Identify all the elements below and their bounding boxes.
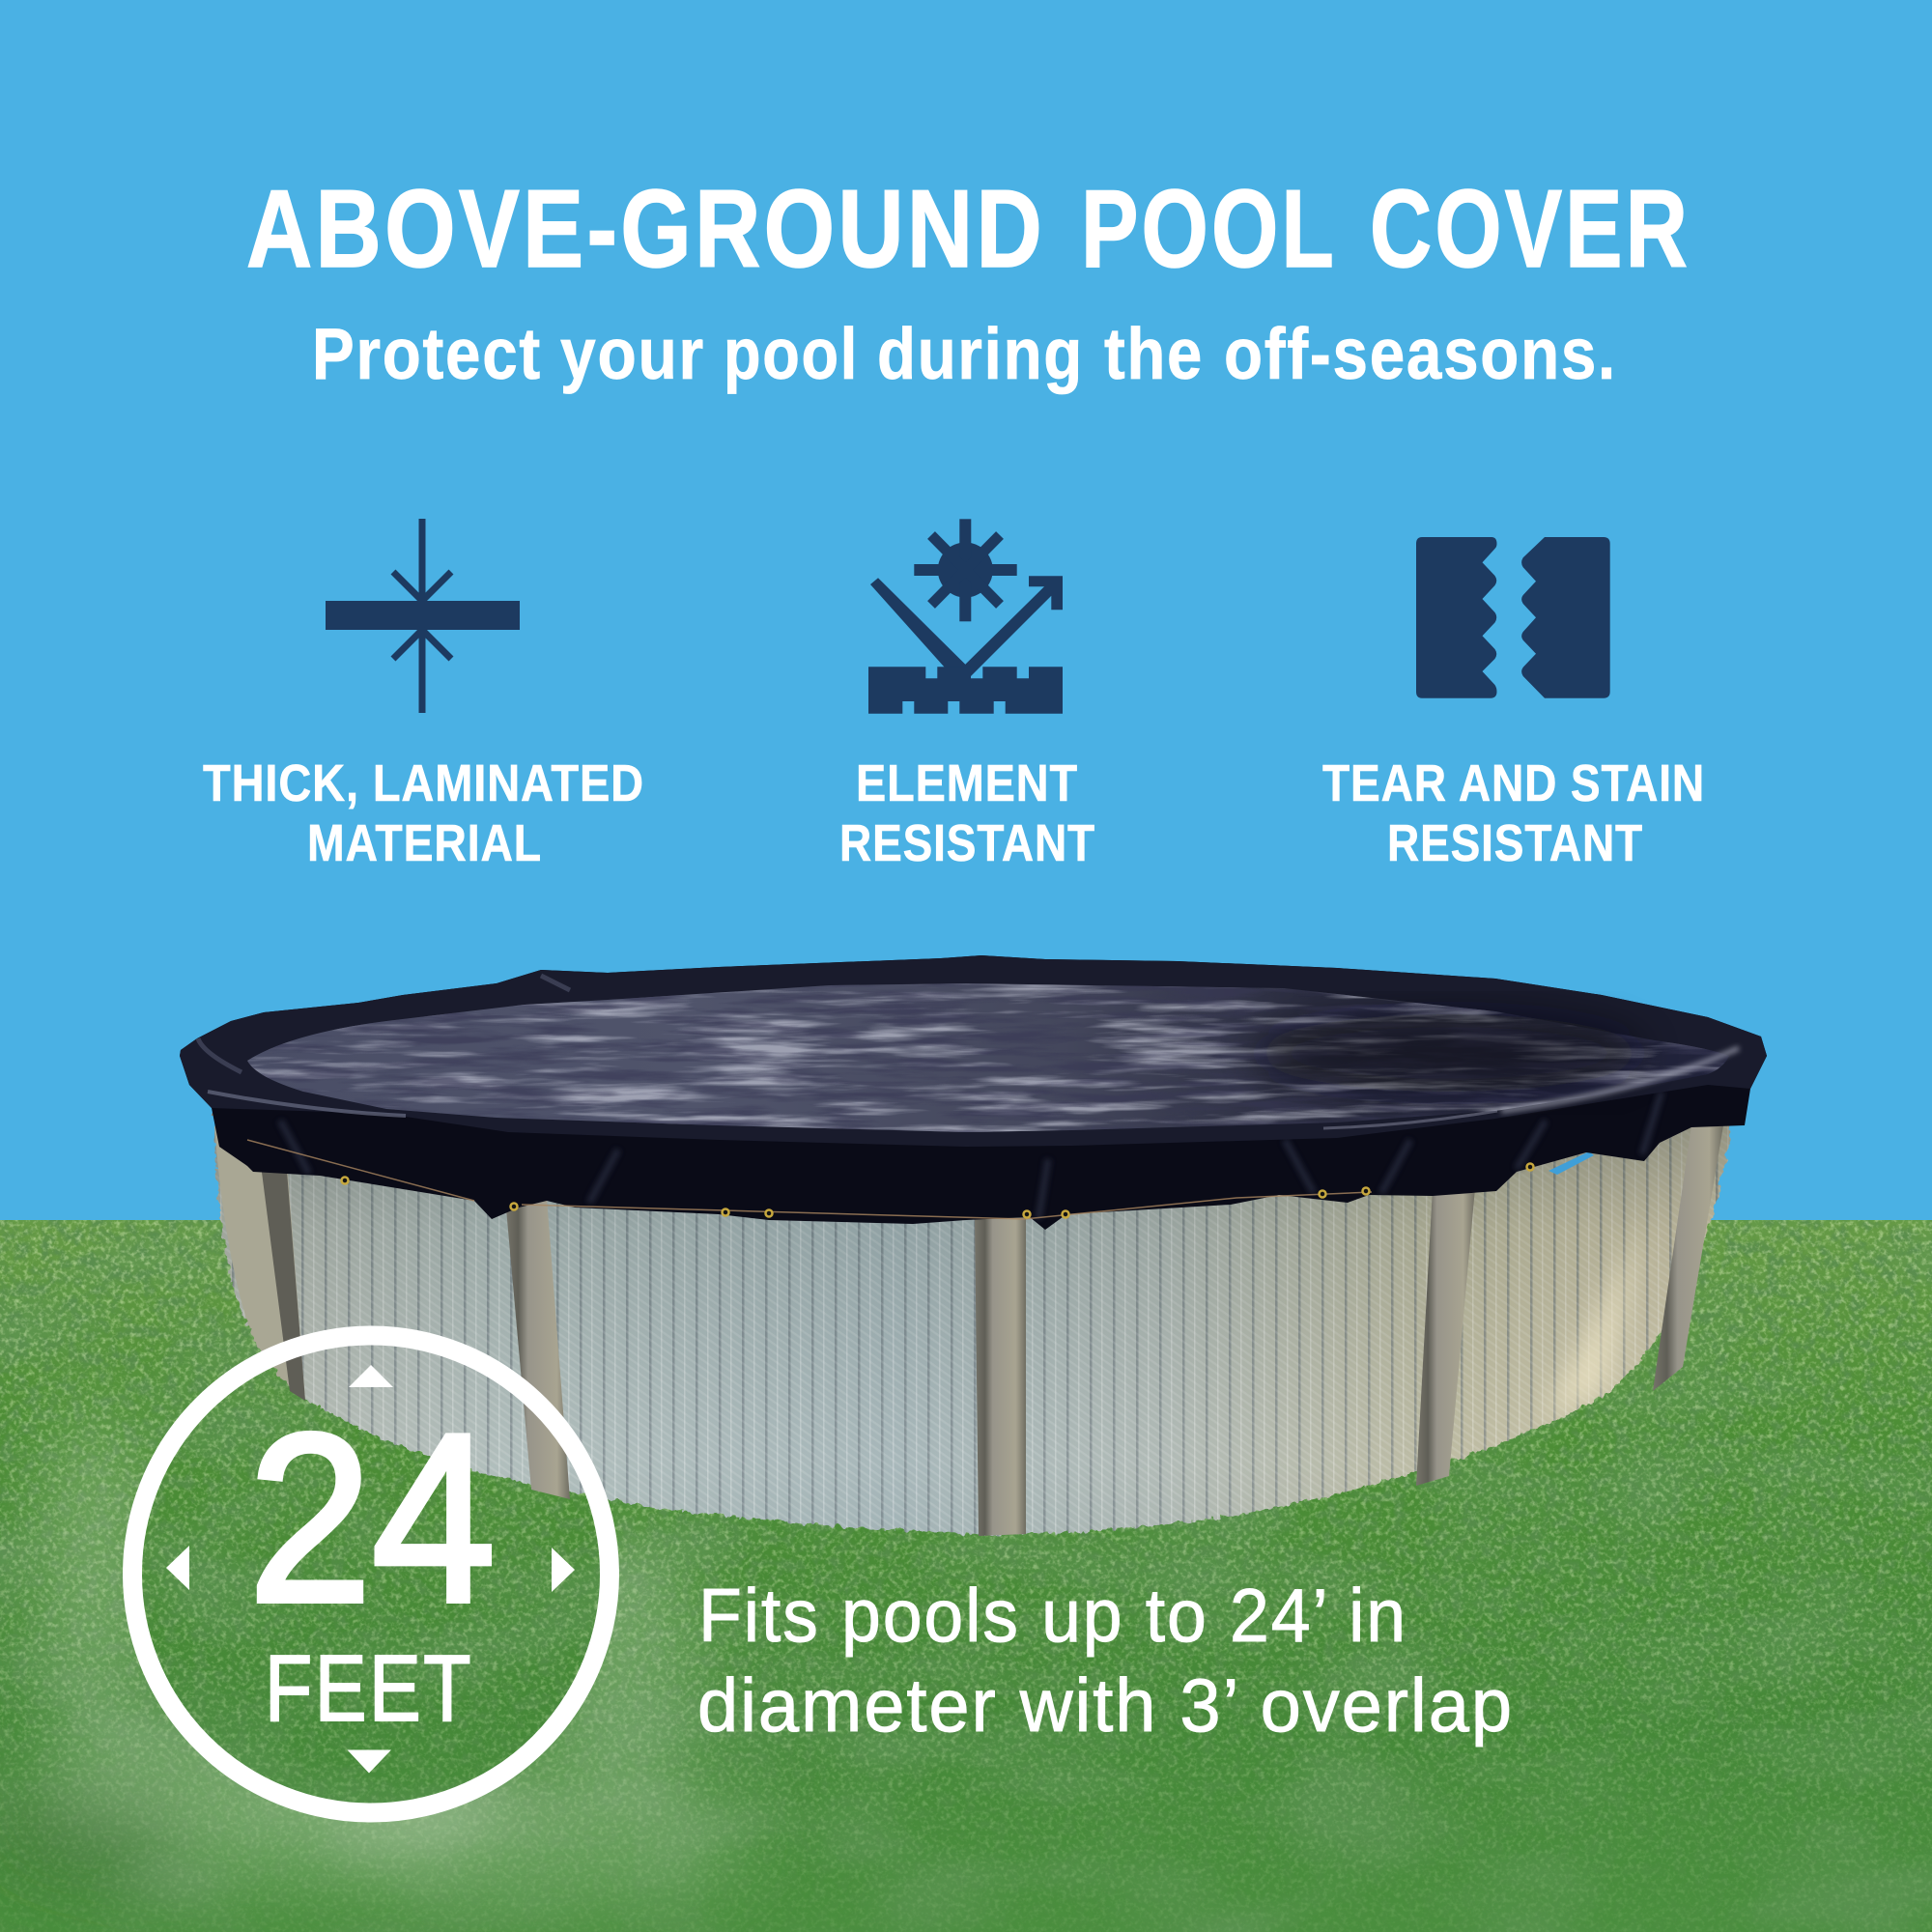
wall post: far right: [1653, 1125, 1723, 1391]
size badge haze: [0, 1410, 753, 1903]
rope and grommets: [247, 1140, 1534, 1219]
wall post: far left: [259, 1150, 305, 1401]
feature: tear and stain resistant: [1322, 537, 1705, 872]
wall gap showing water: [1548, 1151, 1594, 1175]
label: MATERIAL: [307, 814, 542, 872]
title: POOL: [1081, 168, 1337, 291]
subtitle: Protect: [312, 313, 542, 394]
icon: sun reflecting off surface: [868, 519, 1063, 714]
wall post: left: [505, 1198, 570, 1499]
icon: torn material: [1416, 537, 1610, 698]
subtitle: your: [560, 313, 705, 394]
subtitle: off-seasons.: [1224, 313, 1617, 394]
fit description: diameter with 3’ overlap: [697, 1662, 1514, 1747]
wall post: right: [1416, 1188, 1475, 1486]
arrow: right: [552, 1548, 575, 1592]
size badge: 24 feet: [132, 1335, 610, 1812]
icon: layer with pressure arrows: [326, 519, 520, 713]
above-ground pool with cover: [180, 955, 1767, 1555]
grass background: [0, 1220, 1932, 1932]
feature: element resistant: [839, 519, 1095, 872]
subtitle: pool: [724, 313, 859, 394]
number 24: 24: [248, 1383, 496, 1652]
title: ABOVE-GROUND: [246, 168, 1045, 291]
drape folds: [280, 1092, 1662, 1219]
label: RESISTANT: [839, 814, 1095, 872]
word feet: FEET: [265, 1635, 473, 1741]
cover drape: [180, 955, 1767, 1230]
pool wall: [211, 1113, 1731, 1536]
label: TEAR AND STAIN: [1322, 754, 1705, 812]
sky background: [0, 0, 1932, 1221]
title: COVER: [1370, 168, 1690, 291]
badge ring: [132, 1335, 610, 1812]
cover rim: [180, 955, 1767, 1147]
subtitle: during: [877, 313, 1084, 394]
label: THICK, LAMINATED: [203, 754, 644, 812]
arrow: left: [166, 1546, 189, 1590]
subtitle: the: [1104, 313, 1204, 394]
arrow: up: [349, 1365, 393, 1387]
arrow: down: [348, 1750, 391, 1774]
label: RESISTANT: [1387, 814, 1643, 872]
fit description: Fits pools up to 24’ in: [698, 1573, 1407, 1658]
feature: thick laminated material: [203, 519, 644, 872]
wall post: center: [975, 1217, 1026, 1536]
cover texture highlights: [198, 976, 1739, 1132]
cover top surface: [247, 983, 1729, 1132]
label: ELEMENT: [856, 754, 1078, 812]
